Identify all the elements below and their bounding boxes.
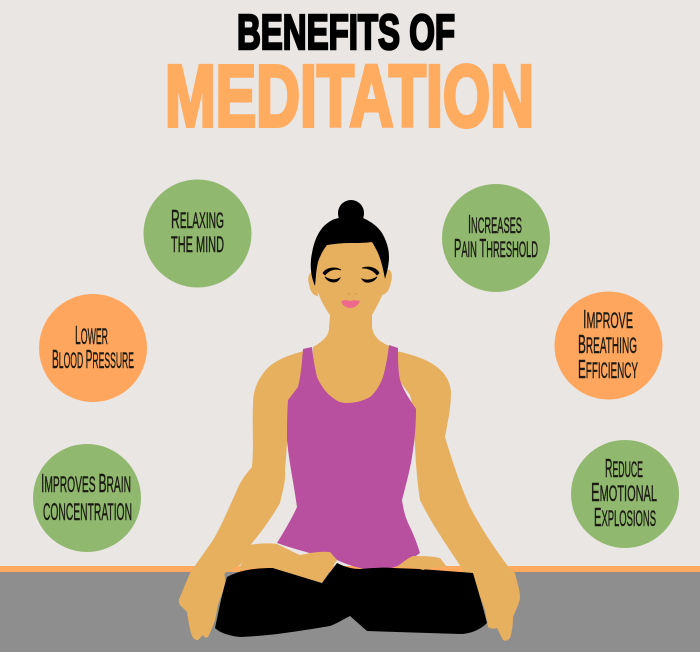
ears (308, 270, 392, 296)
tank top (277, 345, 420, 570)
circle: improve breathing efficiency: BREATHING (578, 329, 637, 359)
left foot (240, 543, 337, 583)
right hand (463, 550, 520, 641)
title: meditation: MEDITATION (165, 48, 534, 145)
hair bun (338, 200, 364, 224)
circle: improves brain concentration: IMPROVES BRAIN (41, 468, 131, 498)
circle: improves brain concentration (33, 444, 141, 552)
circle: increases pain threshold (442, 184, 550, 292)
meditating woman (179, 200, 520, 641)
circle: relaxing the mind (144, 180, 252, 288)
circle: improve breathing efficiency: IMPROVE (583, 304, 633, 334)
left arm (190, 351, 305, 590)
circle: increases pain threshold: PAIN THRESHOLD (454, 233, 538, 263)
head, neck and chest (310, 240, 395, 405)
nose (347, 293, 357, 295)
right arm (395, 351, 513, 590)
hair (311, 218, 389, 286)
title: benefits of: BENEFITS OF (237, 6, 455, 60)
circle: reduce emotional explosions (571, 440, 679, 548)
left eye (323, 268, 341, 282)
circle: improve breathing efficiency: EFFICIENCY (578, 354, 638, 384)
pants (215, 563, 487, 637)
circle: improve breathing efficiency (554, 292, 662, 400)
left hand (179, 542, 240, 640)
lips (341, 300, 360, 308)
circle: lower blood pressure (39, 294, 147, 402)
circle: reduce emotional explosions: REDUCE (605, 453, 643, 483)
circle: lower blood pressure: LOWER (75, 320, 108, 350)
right eye (362, 267, 379, 282)
circle: increases pain threshold: INCREASES (468, 209, 522, 239)
circle: lower blood pressure: BLOOD PRESSURE (52, 344, 134, 374)
circle: relaxing the mind: THE MIND (171, 232, 224, 257)
circle: relaxing the mind: RELAXING (171, 204, 224, 234)
text: CONCENTRATION (43, 499, 132, 526)
right foot (397, 556, 447, 570)
floor (0, 566, 700, 652)
